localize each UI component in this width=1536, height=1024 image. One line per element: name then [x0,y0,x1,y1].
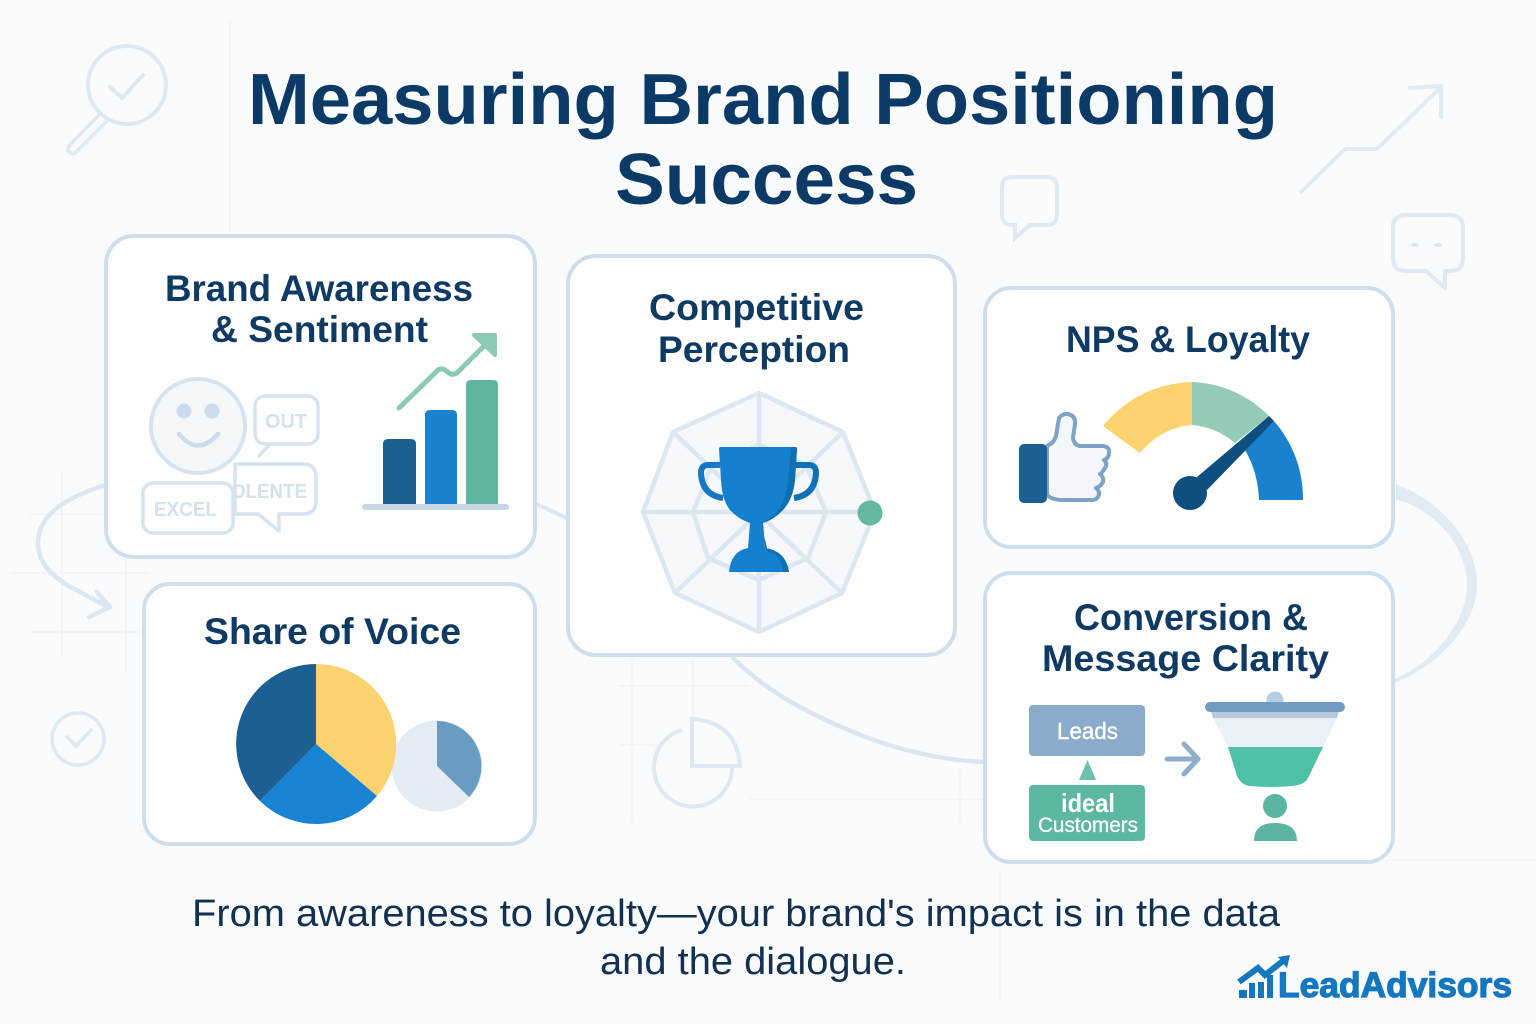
title [248,60,1278,220]
connector: bottom curve [732,657,985,762]
title: Measuring Brand Positioning [248,60,1278,140]
heading: conversion and message clarity [1042,597,1329,679]
box: ideal customers [1029,785,1145,841]
heading: competitive perception: Competitive [649,287,864,328]
icon: thumbs up [1019,414,1109,503]
icon: EXCEL speech bubble [143,483,233,533]
icon: smiley face [151,379,245,473]
heading: brand awareness: Brand Awareness [165,268,473,309]
icon: funnel [1205,692,1345,787]
gauge needle [1173,416,1274,510]
connector: left curved arrow [38,485,110,617]
panel: competitive perception [568,256,955,655]
logo: LeadAdvisors [1239,955,1512,1005]
icon: customer person [1254,794,1297,841]
background icon: check circle [52,713,104,765]
heading: brand awareness: & Sentiment [211,309,428,350]
heading: share of voice: Share of Voice [204,611,461,652]
background icon: chat bubble with dots [1393,215,1463,288]
icon: up triangle [1079,760,1096,780]
panel: brand awareness and sentiment [106,236,535,557]
title: Success [615,140,918,220]
heading: competitive perception [649,287,864,370]
background icon: rising arrow [1300,86,1441,193]
arrow: leads to funnel [1167,744,1198,774]
logo: LeadAdvisors: LeadAdvisors [1278,966,1512,1005]
icon: OUT speech bubble: OUT [265,411,307,433]
heading: conversion and message clarity: Message Clarity [1042,638,1329,679]
arrow: growth trend [399,335,495,408]
panel: conversion and message clarity [985,573,1393,862]
icon: OLENTE speech bubble [231,464,316,531]
connector: right curve [1395,484,1477,683]
box: leads [1029,705,1145,756]
heading: competitive perception: Perception [658,329,850,370]
small pie chart [392,720,482,812]
gauge chart [1103,382,1303,510]
background icon: pie outline [654,719,740,806]
icon: trophy [701,447,816,572]
tagline: and the dialogue. [600,941,906,983]
radar data point [858,500,882,526]
panel: NPS and loyalty [985,288,1393,547]
heading: NPS and loyalty: NPS & Loyalty [1066,319,1310,360]
box: leads: Leads [1057,718,1118,744]
connector: centre link [536,504,567,518]
icon: OLENTE speech bubble: OLENTE [231,481,307,503]
panel: share of voice [144,584,535,844]
radar chart [643,393,875,632]
icon: OUT speech bubble [255,396,318,457]
heading: brand awareness [165,268,473,350]
background icon: magnifier [68,46,166,154]
large pie chart [236,664,396,824]
bar chart [362,335,509,510]
icon: EXCEL speech bubble: EXCEL [154,499,217,521]
heading: conversion and message clarity: Conversion & [1074,597,1308,638]
logo icon: bars and arrow [1239,955,1290,998]
box: ideal customers: Customers [1038,814,1138,837]
box: ideal customers: ideal [1061,788,1115,818]
tagline: From awareness to loyalty—your brand's impact is in the data [192,893,1281,935]
background icon: chat bubble [1002,177,1057,238]
tagline [192,893,1281,983]
